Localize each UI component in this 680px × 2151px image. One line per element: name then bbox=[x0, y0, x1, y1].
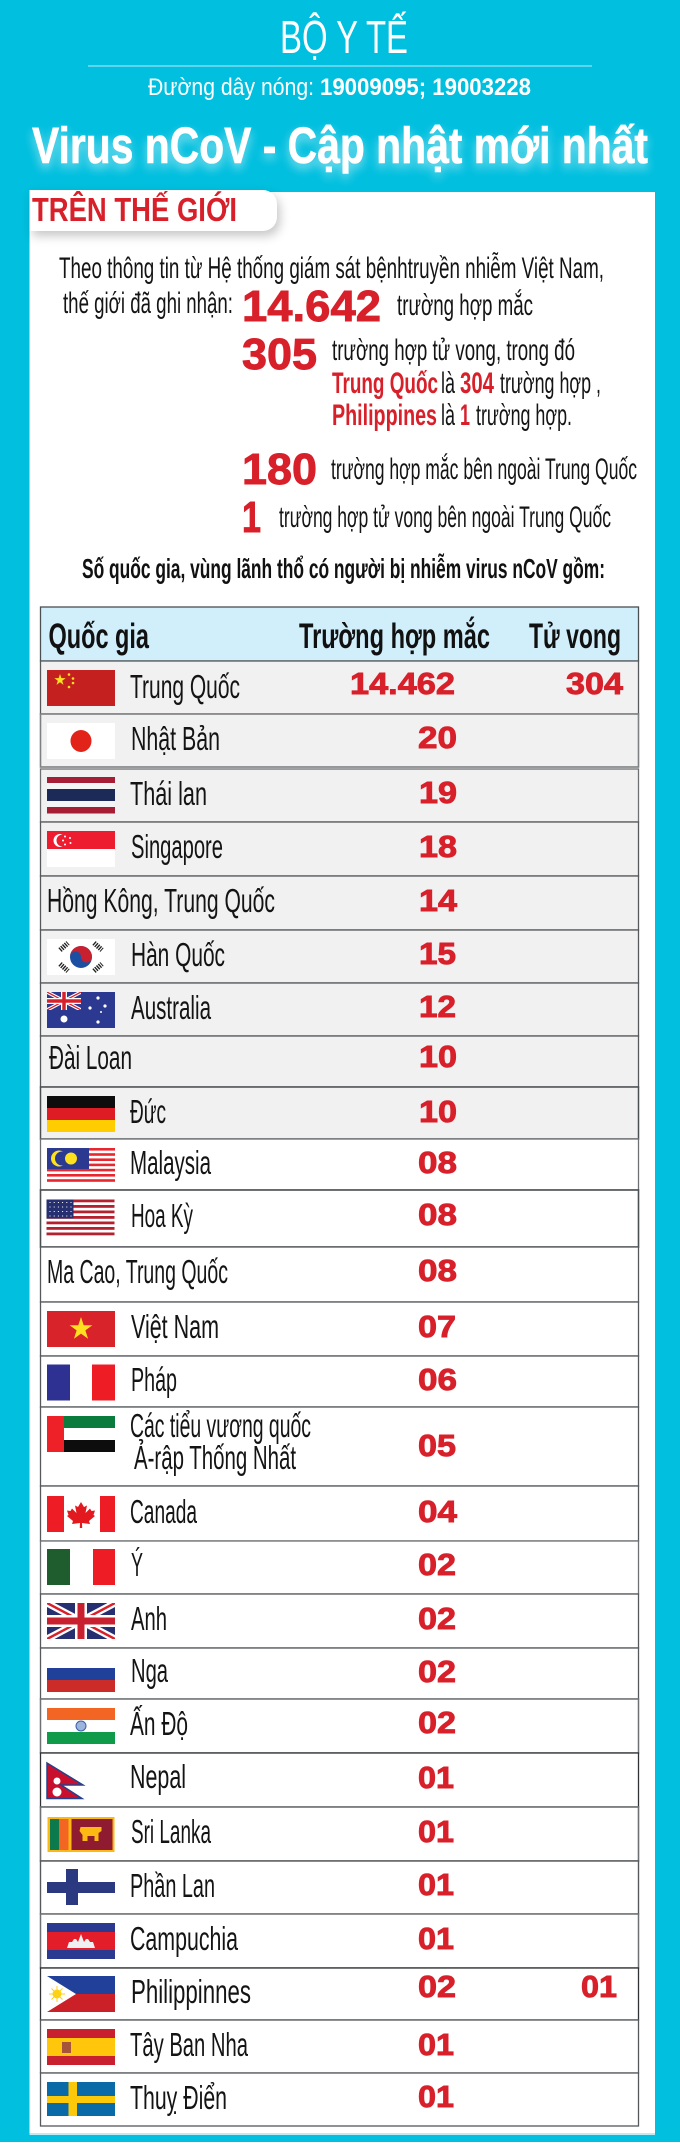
row: Thái Lan: Thái lan bbox=[130, 775, 207, 812]
icon: flag Australia bbox=[47, 992, 115, 1028]
row: Phần Lan: Phần Lan bbox=[130, 1867, 215, 1904]
table: countries bbox=[40, 607, 638, 2126]
row: Campuchia: Campuchia bbox=[130, 1920, 238, 1957]
stat: deaths: 1 bbox=[460, 399, 470, 432]
row: Việt Nam: 07 bbox=[418, 1309, 456, 1344]
row: Hồng Kông: Hồng Kông, Trung Quốc bbox=[47, 882, 275, 919]
row: Singapore bbox=[40, 822, 638, 876]
table header bbox=[40, 607, 638, 661]
row: Malaysia: 08 bbox=[418, 1145, 457, 1180]
heading: ministry name: BỘ Y TẾ bbox=[280, 11, 408, 63]
icon: flag Nepal bbox=[47, 1763, 83, 1798]
hotline text bbox=[148, 74, 531, 101]
row: Ý bbox=[40, 1541, 638, 1594]
row: Ma Cao: 08 bbox=[418, 1253, 457, 1288]
table header: Quốc gia bbox=[48, 617, 149, 656]
row: Campuchia bbox=[40, 1914, 638, 1968]
stat: deaths outside China bbox=[242, 493, 611, 542]
stat: total cases bbox=[242, 282, 533, 331]
row: Nepal: 01 bbox=[418, 1760, 454, 1795]
row: Ý: Ý bbox=[131, 1546, 143, 1583]
row: Trung Quốc: 304 bbox=[566, 666, 624, 701]
row: Đài Loan: 10 bbox=[419, 1039, 457, 1074]
row: Australia bbox=[40, 983, 638, 1036]
row: Ấn Độ: Ấn Độ bbox=[130, 1705, 188, 1742]
icon: flag Germany bbox=[47, 1096, 115, 1132]
stat: total cases: 14.642 bbox=[242, 282, 381, 331]
row: Nga bbox=[40, 1648, 638, 1699]
row: Các tiểu vương quốc Ả-rập Thống Nhất: 05 bbox=[418, 1428, 456, 1463]
row: Thụy Điển bbox=[40, 2073, 638, 2126]
stat: deaths bbox=[242, 330, 601, 432]
table header: Tử vong bbox=[529, 617, 621, 656]
row: Việt Nam bbox=[40, 1302, 638, 1356]
row: Ấn Độ: 02 bbox=[418, 1705, 456, 1740]
row: Đức: 10 bbox=[419, 1094, 457, 1129]
row: Nhật Bản bbox=[40, 714, 638, 767]
stat: cases outside China: 180 bbox=[242, 445, 317, 494]
row: Malaysia: Malaysia bbox=[130, 1144, 211, 1181]
stat: deaths: Trung Quốc bbox=[332, 367, 438, 400]
row: Tây Ban Nha: Tây Ban Nha bbox=[130, 2026, 248, 2063]
stat: deaths outside China: 1 bbox=[242, 493, 261, 542]
row: Malaysia bbox=[40, 1139, 638, 1190]
row: Ấn Độ bbox=[40, 1699, 638, 1753]
row: Anh bbox=[40, 1594, 638, 1648]
stat: deaths: Philippines bbox=[332, 399, 437, 432]
row: Hồng Kông: 14 bbox=[419, 883, 458, 918]
row: Ý: 02 bbox=[418, 1547, 456, 1582]
row: Trung Quốc: Trung Quốc bbox=[130, 668, 240, 705]
row: Hồng Kông bbox=[40, 876, 638, 930]
row: Pháp: Pháp bbox=[131, 1361, 177, 1398]
row: Đức bbox=[40, 1087, 638, 1139]
icon: flag India bbox=[47, 1708, 115, 1744]
row: Singapore: Singapore bbox=[131, 828, 223, 865]
icon: flag Spain bbox=[47, 2029, 115, 2065]
row: Nga: Nga bbox=[131, 1652, 168, 1689]
row: Hoa Kỳ bbox=[40, 1190, 638, 1247]
text block: intro bbox=[59, 252, 604, 320]
row: Đài Loan: Đài Loan bbox=[49, 1039, 132, 1076]
row: Tây Ban Nha bbox=[40, 2020, 638, 2073]
icon: flag Italy bbox=[47, 1549, 115, 1585]
row: Australia: 12 bbox=[419, 989, 456, 1024]
row: Sri Lanka bbox=[40, 1807, 638, 1861]
row: Philippinnes: 01 bbox=[581, 1969, 617, 2004]
row: Campuchia: 01 bbox=[418, 1921, 454, 1956]
row: Philippinnes: Philippinnes bbox=[131, 1973, 251, 2010]
stat: cases outside China bbox=[242, 445, 637, 494]
row: Sri Lanka: 01 bbox=[418, 1814, 454, 1849]
icon: flag Russia bbox=[47, 1668, 115, 1692]
icon: flag UK bbox=[47, 1603, 115, 1639]
stat: deaths: 305 bbox=[242, 330, 317, 379]
icon: flag Canada bbox=[47, 1496, 115, 1532]
row: Hàn Quốc: Hàn Quốc bbox=[131, 936, 225, 973]
row: Philippinnes: 02 bbox=[418, 1969, 456, 2004]
stat: deaths: trường hợp , bbox=[500, 367, 601, 400]
row: Singapore: 18 bbox=[419, 829, 457, 864]
row: Trung Quốc bbox=[40, 661, 638, 714]
icon: flag UAE bbox=[47, 1416, 115, 1452]
row: Hoa Kỳ: 08 bbox=[418, 1197, 457, 1232]
row: Hàn Quốc: 15 bbox=[419, 936, 456, 971]
icon: flag Finland bbox=[47, 1869, 115, 1905]
icon: flag Japan bbox=[47, 723, 115, 759]
stat: deaths: là bbox=[441, 399, 455, 432]
icon: flag South Korea bbox=[47, 939, 115, 975]
row: Các tiểu vương quốc Ả-rập Thống Nhất bbox=[40, 1407, 638, 1486]
row: Sri Lanka: Sri Lanka bbox=[131, 1813, 211, 1850]
row: Các tiểu vương quốc Ả-rập Thống Nhất: Ả-rập Thống Nhất bbox=[134, 1439, 296, 1476]
stat: deaths: trường hợp. bbox=[476, 399, 572, 432]
row: Pháp bbox=[40, 1356, 638, 1407]
icon: flag China bbox=[47, 670, 115, 706]
row: Nepal: Nepal bbox=[130, 1758, 186, 1795]
icon: flag Malaysia bbox=[47, 1148, 115, 1184]
row: Thụy Điển: Thuỵ Điển bbox=[130, 2079, 227, 2116]
tab heading: on the world: TRÊN THẾ GIỚI bbox=[32, 191, 237, 228]
text block: intro: thế giới đã ghi nhận: bbox=[63, 287, 233, 320]
icon: flag USA bbox=[46, 1200, 114, 1236]
row: Việt Nam: Việt Nam bbox=[131, 1308, 219, 1345]
row: Canada: 04 bbox=[418, 1494, 458, 1529]
row: Phần Lan: 01 bbox=[418, 1867, 454, 1902]
row: Thái Lan: 19 bbox=[419, 775, 457, 810]
row: Thụy Điển: 01 bbox=[418, 2079, 454, 2114]
row: Hoa Kỳ: Hoa Kỳ bbox=[131, 1197, 193, 1234]
icon: flag Singapore bbox=[47, 831, 115, 867]
row: Nhật Bản: 20 bbox=[418, 720, 457, 755]
icon: flag Cambodia bbox=[47, 1923, 115, 1959]
hotline text: 19009095; 19003228 bbox=[320, 74, 531, 101]
icon: flag Vietnam bbox=[47, 1311, 115, 1347]
row: Ma Cao bbox=[40, 1247, 638, 1302]
row: Australia: Australia bbox=[131, 989, 211, 1026]
row: Tây Ban Nha: 01 bbox=[418, 2027, 454, 2062]
row: Đài Loan bbox=[40, 1036, 638, 1087]
row: Canada bbox=[40, 1486, 638, 1541]
stat: deaths: là bbox=[441, 367, 455, 400]
table header: Trường hợp mắc bbox=[299, 616, 490, 656]
row: Ma Cao: Ma Cao, Trung Quốc bbox=[47, 1253, 228, 1290]
icon: flag Sri Lanka bbox=[48, 1817, 114, 1852]
stat: total cases: trường hợp mắc bbox=[397, 289, 533, 322]
icon: flag Thailand bbox=[47, 777, 115, 814]
row: Thái Lan bbox=[40, 769, 638, 822]
row: Anh: Anh bbox=[131, 1600, 167, 1637]
row: Canada: Canada bbox=[130, 1493, 197, 1530]
row: Philippinnes bbox=[40, 1968, 638, 2020]
row: Phần Lan bbox=[40, 1861, 638, 1914]
row: Trung Quốc: 14.462 bbox=[350, 666, 455, 701]
row: Các tiểu vương quốc Ả-rập Thống Nhất: Các tiểu vương quốc bbox=[130, 1407, 311, 1444]
stat: deaths: 304 bbox=[460, 367, 494, 400]
icon: flag Philippines bbox=[47, 1976, 115, 2012]
row: Pháp: 06 bbox=[418, 1362, 457, 1397]
row: Anh: 02 bbox=[418, 1601, 456, 1636]
icon: flag France bbox=[47, 1364, 115, 1400]
row: Nga: 02 bbox=[418, 1654, 456, 1689]
row: Đức: Đức bbox=[130, 1093, 166, 1130]
row: Nhật Bản: Nhật Bản bbox=[131, 720, 220, 757]
icon: flag Sweden bbox=[47, 2082, 115, 2116]
hotline text: Đường dây nóng: bbox=[148, 74, 314, 101]
row: Hàn Quốc bbox=[40, 930, 638, 983]
row: Nepal bbox=[40, 1753, 638, 1807]
